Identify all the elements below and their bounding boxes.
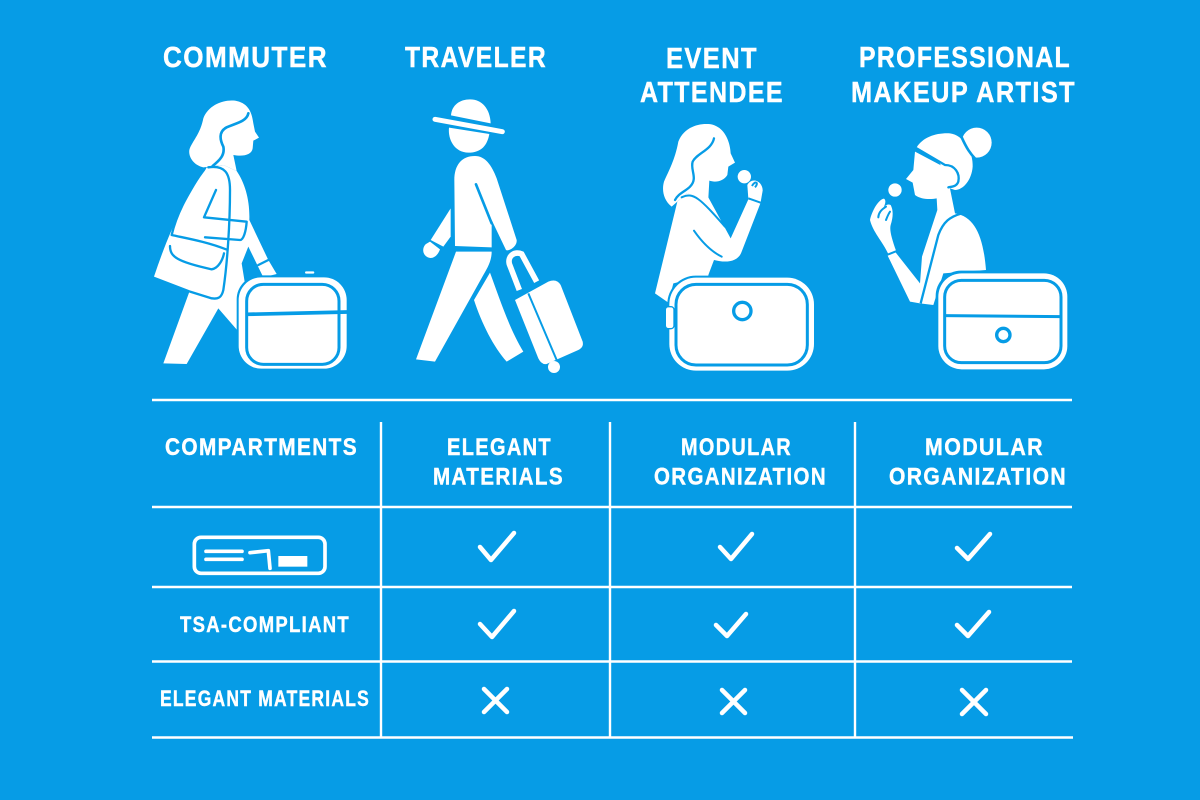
- heading: traveler: TRAVELER: [405, 42, 547, 74]
- icon: compartments tray: [194, 537, 325, 573]
- icon: professional makeup artist with case: [870, 128, 1070, 372]
- checks: tsa-compliant row: [480, 611, 989, 637]
- heading: event attendee: [640, 43, 784, 109]
- table header: modular organization: [654, 434, 827, 490]
- heading: event attendee: ATTENDEE: [640, 77, 784, 109]
- table header: modular organization 2: [889, 434, 1067, 490]
- heading: professional makeup artist: PROFESSIONAL: [859, 42, 1071, 74]
- table header: elegant materials: [433, 434, 564, 490]
- heading: professional makeup artist: [851, 42, 1076, 109]
- crosses: elegant materials row: [484, 689, 986, 714]
- checks: compartments row: [480, 533, 990, 560]
- table header: modular organization 2: MODULAR: [925, 434, 1044, 461]
- table: grid lines: [152, 400, 1073, 738]
- heading: commuter: COMMUTER: [163, 42, 328, 74]
- heading: professional makeup artist: MAKEUP ARTIST: [851, 77, 1076, 109]
- row label: elegant materials: ELEGANT MATERIALS: [160, 686, 370, 711]
- table header: modular organization 2: ORGANIZATION: [889, 464, 1067, 490]
- table header: compartments: COMPARTMENTS: [165, 434, 358, 461]
- table header: modular organization: MODULAR: [681, 434, 792, 461]
- heading: event attendee: EVENT: [666, 43, 758, 75]
- row label: tsa-compliant: TSA-COMPLIANT: [180, 612, 350, 637]
- table header: elegant materials: ELEGANT: [447, 434, 552, 461]
- table header: modular organization: ORGANIZATION: [654, 464, 827, 490]
- table header: elegant materials: MATERIALS: [433, 464, 564, 490]
- icon: traveler with hat and roller suitcase: [416, 99, 583, 373]
- icon: event attendee applying makeup with pouch: [655, 124, 816, 373]
- icon: commuter with shoulder bag and case: [154, 100, 348, 370]
